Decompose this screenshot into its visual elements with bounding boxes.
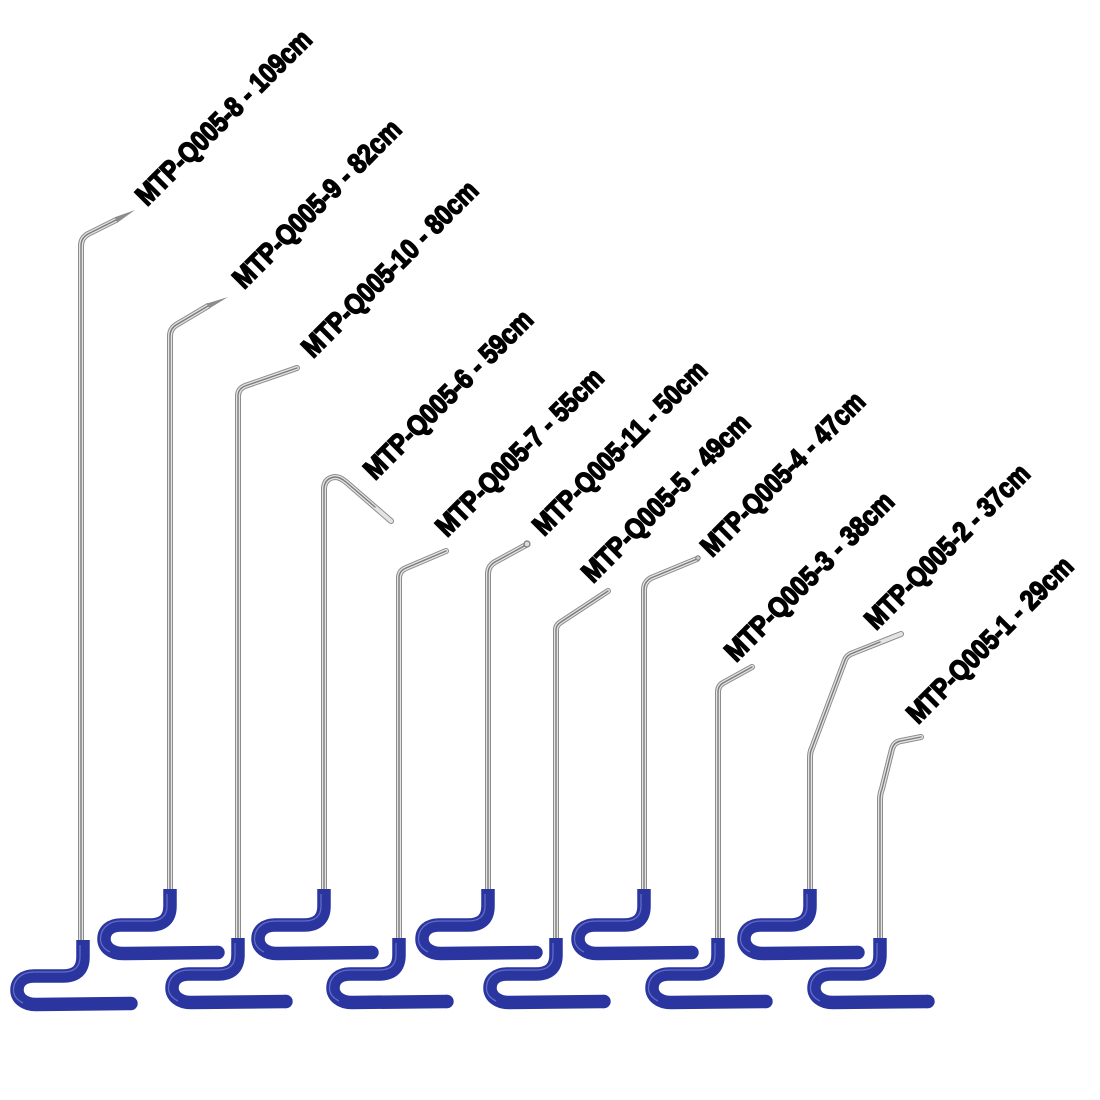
handle: MTP-Q005-4 <box>574 889 699 959</box>
handle: MTP-Q005-8 <box>14 940 138 1010</box>
label: MTP-Q005-5: MTP-Q005-5 - 49cm <box>575 407 756 588</box>
handle: MTP-Q005-11 <box>418 889 543 959</box>
rod: MTP-Q005-5 <box>556 591 608 938</box>
rod: MTP-Q005-8 <box>81 210 135 940</box>
label: MTP-Q005-2: MTP-Q005-2 - 37cm <box>858 458 1036 635</box>
rod: MTP-Q005-9 <box>170 297 228 889</box>
label: MTP-Q005-7: MTP-Q005-7 - 55cm <box>429 362 610 542</box>
rod: MTP-Q005-2 <box>810 634 901 889</box>
label: MTP-Q005-8: MTP-Q005-8 - 109cm <box>129 23 318 211</box>
handle: MTP-Q005-2 <box>740 889 865 959</box>
handle: MTP-Q005-9 <box>100 889 225 959</box>
label: MTP-Q005-3: MTP-Q005-3 - 38cm <box>718 486 900 667</box>
handle: MTP-Q005-10 <box>168 938 293 1008</box>
handle: MTP-Q005-1 <box>810 938 935 1008</box>
label: MTP-Q005-9: MTP-Q005-9 - 82cm <box>226 113 407 294</box>
handle: MTP-Q005-6 <box>254 889 379 959</box>
rod: MTP-Q005-6 <box>324 477 391 889</box>
rod: MTP-Q005-7 <box>399 551 446 938</box>
rod: MTP-Q005-3 <box>718 667 752 938</box>
rod: MTP-Q005-4 <box>644 556 700 889</box>
label: MTP-Q005-1: MTP-Q005-1 - 29cm <box>900 550 1079 729</box>
rod: MTP-Q005-1 <box>880 737 921 938</box>
handle: MTP-Q005-7 <box>330 938 454 1008</box>
label: MTP-Q005-10: MTP-Q005-10 - 80cm <box>295 174 484 363</box>
label: MTP-Q005-6: MTP-Q005-6 - 59cm <box>357 304 539 485</box>
rod: MTP-Q005-11 <box>488 541 530 889</box>
label: MTP-Q005-4: MTP-Q005-4 - 47cm <box>694 385 871 562</box>
label: MTP-Q005-11: MTP-Q005-11 - 50cm <box>526 355 713 541</box>
handle: MTP-Q005-3 <box>648 938 773 1008</box>
rod: MTP-Q005-10 <box>238 368 297 938</box>
handle: MTP-Q005-5 <box>486 938 611 1008</box>
